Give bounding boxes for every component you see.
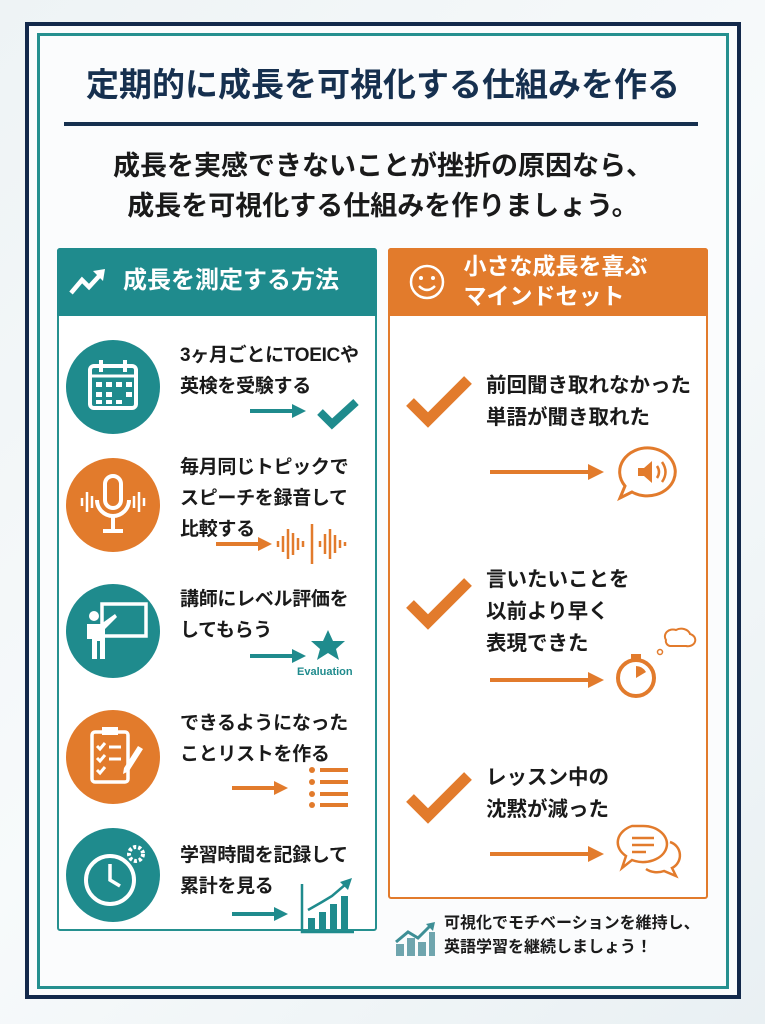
item 1: TOEIC <box>66 340 359 434</box>
panel: measurement methods <box>57 248 377 931</box>
item 4: can-do list: ことリストを作る <box>180 744 330 765</box>
icon: clock <box>66 828 160 922</box>
arrow + speaker bubble <box>490 446 677 502</box>
item 2: speech: 比較する <box>180 519 255 540</box>
item 5: study time: 累計を見る <box>180 876 274 897</box>
mindset item 2: 表現できた <box>486 632 588 655</box>
mindset item 1: 単語が聞き取れた <box>486 406 650 429</box>
arrow + chat bubbles <box>490 824 682 878</box>
icon: teacher <box>66 584 160 678</box>
icon: calendar <box>66 340 160 434</box>
item 1: TOEIC: 3ヶ月ごとにTOEICや <box>180 345 359 366</box>
footer message <box>395 914 700 956</box>
title: 定期的に成長を可視化する仕組みを作る <box>86 66 680 103</box>
subtitle: 成長を可視化する仕組みを作りましょう。 <box>127 191 639 221</box>
arrow + check <box>250 399 359 430</box>
heading: mindset: 小さな成長を喜ぶ <box>464 252 648 278</box>
arrow + star <box>250 630 353 678</box>
heading: measurement <box>57 248 377 316</box>
arrow + stopwatch <box>490 628 696 698</box>
mindset item 2: 以前より早く <box>486 600 609 623</box>
mindset item 1 <box>406 374 691 502</box>
item 2: speech <box>66 456 348 564</box>
icon: check <box>406 376 472 428</box>
icon: growth chart <box>395 922 435 956</box>
item 5: study time: 学習時間を記録して <box>180 845 348 866</box>
item 3: teacher evaluation: してもらう <box>180 620 272 641</box>
heading: measurement: 成長を測定する方法 <box>123 267 339 294</box>
heading: mindset <box>388 248 708 316</box>
item 2: speech: 毎月同じトピックで <box>180 457 348 478</box>
footer message: 英語学習を継続しましょう！ <box>444 939 652 956</box>
icon: checklist <box>66 710 160 804</box>
icon: check <box>406 772 472 824</box>
icon: smiley <box>410 264 444 300</box>
mindset item 3: レッスン中の <box>486 766 609 789</box>
item 4: can-do list <box>66 710 348 808</box>
item 2: speech: スピーチを録音して <box>180 488 348 509</box>
footer message: 可視化でモチベーションを維持し、 <box>444 915 700 932</box>
icon: check <box>406 578 472 630</box>
panel: mindset <box>388 248 708 899</box>
mindset item 3 <box>406 766 682 878</box>
subtitle <box>113 151 653 221</box>
heading: mindset: マインドセット <box>464 282 624 308</box>
item 5: study time <box>66 828 354 934</box>
item 3: teacher evaluation: 講師にレベル評価を <box>180 589 348 610</box>
arrow + waveform <box>216 524 346 564</box>
item 4: can-do list: できるようになった <box>180 713 348 734</box>
arrow + list <box>232 767 348 808</box>
mindset item 3: 沈黙が減った <box>486 798 609 821</box>
arrow + bar chart <box>232 878 354 934</box>
arrow + star: Evaluation <box>297 666 353 678</box>
icon: trend arrow <box>69 269 105 294</box>
subtitle: 成長を実感できないことが挫折の原因なら、 <box>113 151 653 181</box>
icon: microphone <box>66 458 160 552</box>
mindset item 2: 言いたいことを <box>486 568 630 591</box>
mindset item 1: 前回聞き取れなかった <box>486 374 691 397</box>
item 1: TOEIC: 英検を受験する <box>180 376 311 397</box>
item 3: teacher evaluation <box>66 584 353 678</box>
mindset item 2 <box>406 568 696 698</box>
